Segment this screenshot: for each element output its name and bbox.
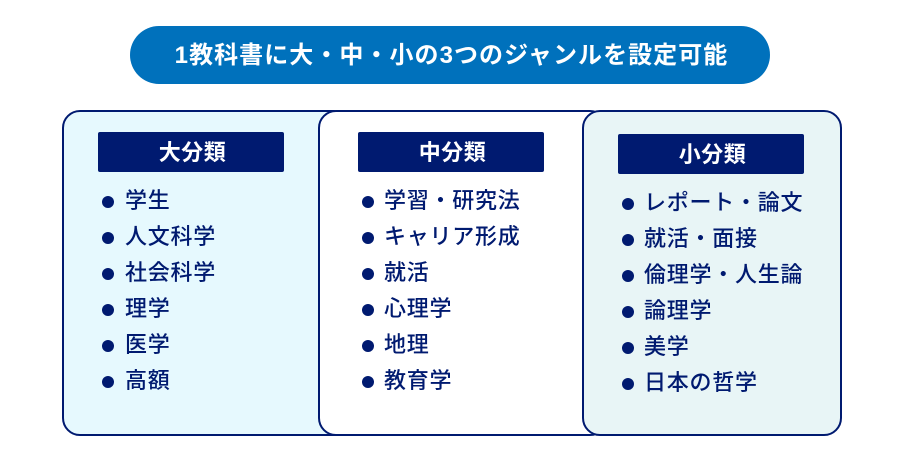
heading: 中分類 [358, 132, 544, 172]
panel: 小分類 [582, 110, 842, 436]
list item: 論理学: 論理学 [644, 298, 712, 323]
list item: 学生: 学生 [125, 188, 171, 213]
list item: 倫理学・人生論: 倫理学・人生論 [644, 262, 803, 287]
list item: 美学: 美学 [644, 334, 690, 359]
heading: 中分類: 中分類 [419, 140, 486, 165]
title banner: 1教科書に大・中・小の3つのジャンルを設定可能 [175, 42, 728, 69]
list item: 心理学: 心理学 [384, 296, 452, 321]
list item: 地理: 地理 [384, 332, 430, 357]
heading: 小分類: 小分類 [679, 142, 746, 167]
list item: 教育学: 教育学 [384, 368, 452, 393]
list item: レポート・論文: レポート・論文 [644, 190, 803, 215]
list item: 就活 [362, 260, 430, 285]
list item: 医学 [102, 332, 171, 357]
panel: 中分類 [318, 110, 608, 436]
list item: 地理 [362, 332, 430, 357]
list item: 就活・面接: 就活・面接 [644, 226, 758, 251]
list item: 理学 [102, 296, 171, 321]
heading: 大分類 [98, 132, 284, 172]
list item: 学生 [102, 188, 171, 213]
list item: 日本の哲学: 日本の哲学 [644, 370, 758, 395]
title banner [130, 26, 770, 84]
panel: 大分類 [62, 110, 352, 436]
list item: 社会科学: 社会科学 [125, 260, 216, 285]
list item: 人文科学: 人文科学 [125, 224, 216, 249]
list item: 学習・研究法: 学習・研究法 [384, 188, 521, 213]
list item: 理学: 理学 [125, 296, 171, 321]
list item: 高額 [102, 368, 171, 393]
list item: 高額: 高額 [125, 368, 171, 393]
list item: キャリア形成: キャリア形成 [384, 224, 521, 249]
heading: 大分類: 大分類 [159, 140, 226, 165]
list item: 美学 [622, 334, 690, 359]
heading: 小分類 [618, 134, 804, 174]
list item: 医学: 医学 [125, 332, 171, 357]
list item: 就活: 就活 [384, 260, 430, 285]
